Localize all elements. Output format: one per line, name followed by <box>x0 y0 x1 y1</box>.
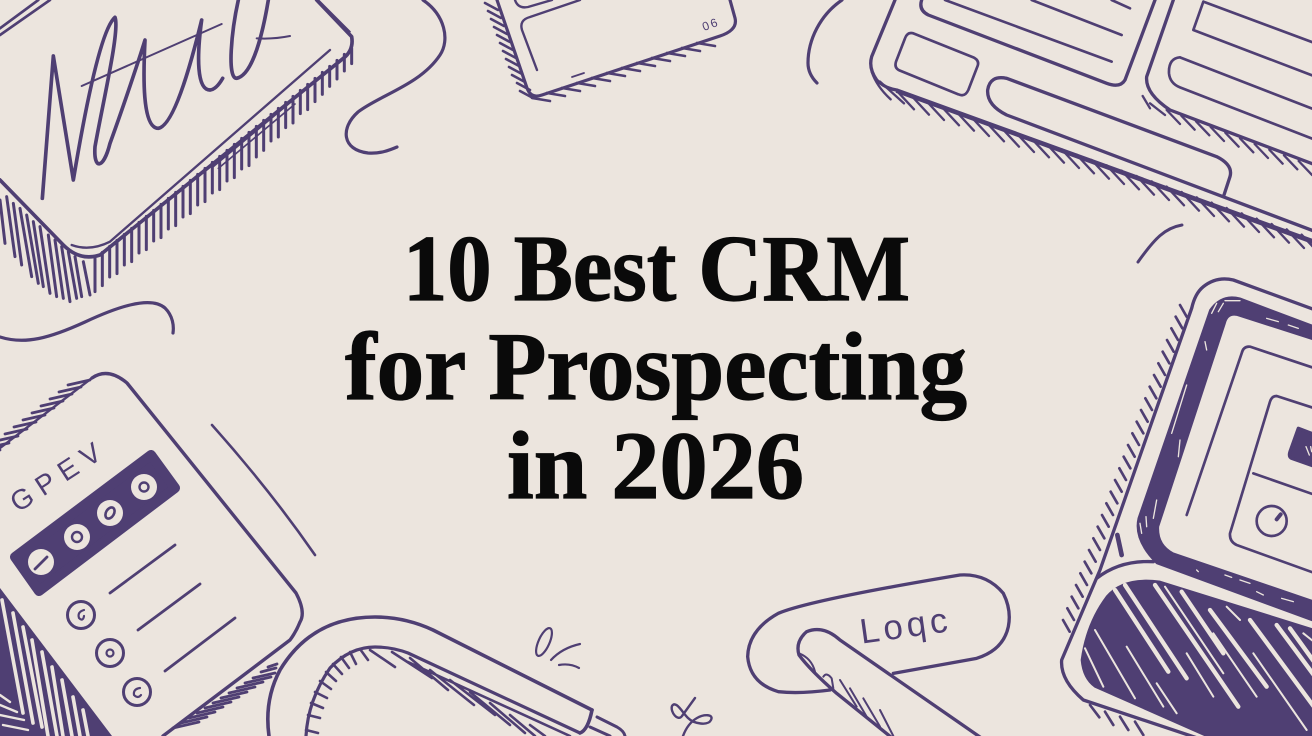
hatched side of checklist card <box>0 588 112 736</box>
icon: tablet device right <box>1062 279 1312 736</box>
hand lettering Loqc: Loqc <box>857 600 954 652</box>
arc top right <box>808 0 842 83</box>
dial <box>1257 506 1287 536</box>
arc mid right <box>1138 225 1182 262</box>
title <box>345 217 967 519</box>
long slash line <box>212 425 315 555</box>
icon: finger pressing login pill <box>748 575 1009 736</box>
hand lettering GPEV: GPEV <box>4 432 113 518</box>
dark button <box>1289 428 1312 468</box>
icon: top centre card <box>485 0 735 101</box>
icon: curved handle bottom centre <box>268 617 625 736</box>
list bullets <box>68 602 150 706</box>
dark toolbar <box>15 455 175 591</box>
label: 06: 06 <box>700 15 721 34</box>
squiggle left <box>0 303 173 340</box>
icon: small bow <box>672 698 712 736</box>
title line 1: 10 Best CRM <box>403 217 910 321</box>
icon: browser window top right <box>871 0 1312 259</box>
icon: checklist card left <box>0 374 302 736</box>
icon: signed card top left <box>0 0 352 302</box>
signature scribble <box>42 0 290 198</box>
title line 3: in 2026 <box>507 412 804 519</box>
screen frame <box>1137 297 1312 623</box>
title line 2: for Prospecting <box>345 313 967 420</box>
hatched base <box>1082 581 1312 736</box>
squiggle right of card <box>346 0 445 153</box>
icon: spark marks <box>533 626 580 668</box>
